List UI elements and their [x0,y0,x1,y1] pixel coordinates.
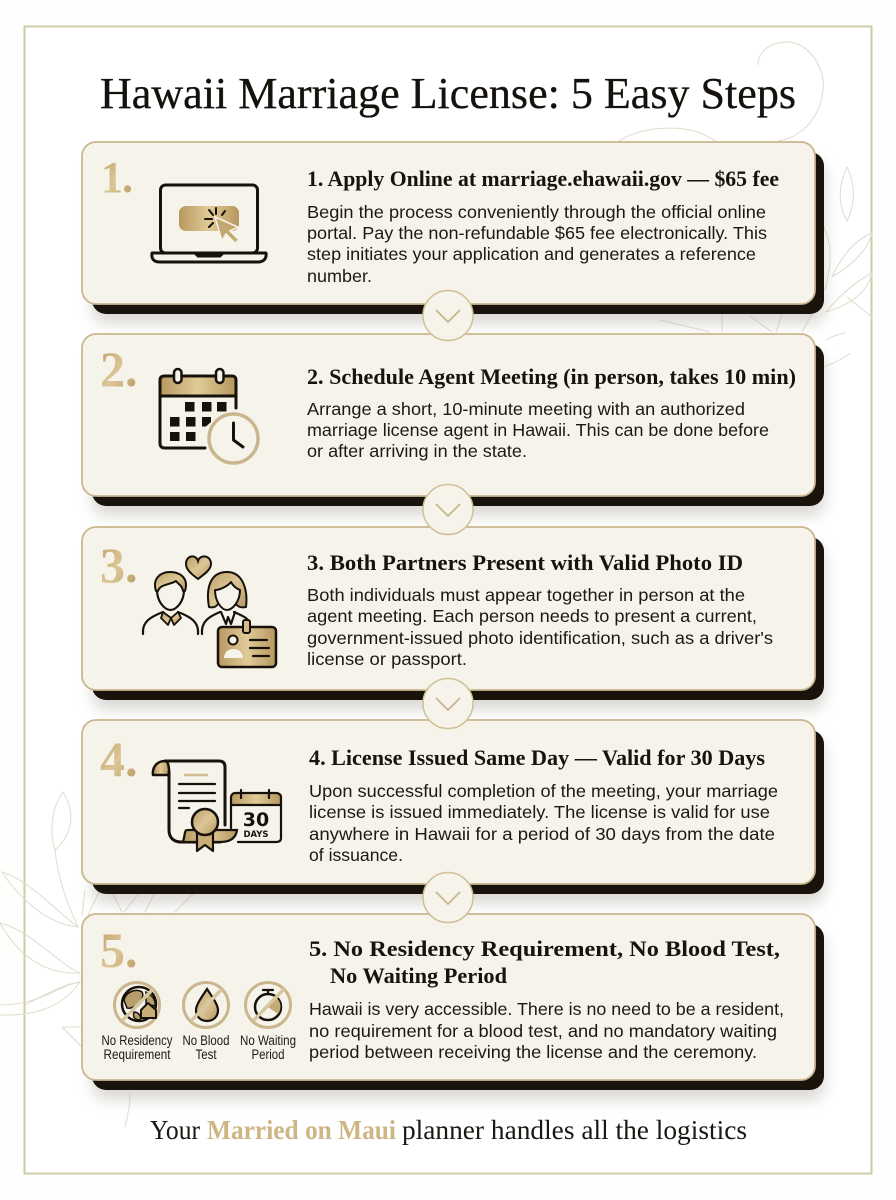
title: Hawaii Marriage License: 5 Easy Steps [100,69,796,118]
step 5 heading [309,936,780,988]
step 3 heading: 3. Both Partners Present with Valid Photo ID [307,550,743,575]
step 1 text [307,202,767,286]
step 2 text: marriage license agent in Hawaii. This can be done before [307,420,769,440]
step 3 text: government-issued photo identification, such as a driver's [307,628,773,648]
arrow: step 3 to 4 [423,678,473,728]
step 4 heading: 4. License Issued Same Day — Valid for 30 Days [309,745,765,770]
step 4 text: Upon successful completion of the meeting, your marriage [309,781,778,801]
step 1 heading: 1. Apply Online at marriage.ehawaii.gov — $65 fee [307,166,779,191]
panel: step 5 [82,914,825,1100]
icon captions [102,1033,296,1062]
step 1 text: number. [307,266,372,286]
botanical decoration: top right [618,42,872,367]
step 1 text: portal. Pay the non-refundable $65 fee electronically. This [307,223,767,243]
step 4 text: license is issued immediately. The license is valid for use [309,802,770,822]
step 5 heading: No Waiting Period [330,963,507,988]
panel: step 3: 3. [100,537,138,593]
step 1 text: Begin the process conveniently through the official online [307,202,766,222]
footer tagline [150,1115,747,1145]
step 2 text: Arrange a short, 10-minute meeting with an authorized [307,399,745,419]
icon: license scroll and 30 day calendar [153,761,281,851]
icon: license scroll and 30 day calendar: 30 [243,809,269,831]
icon captions: Requirement [104,1047,171,1062]
footer tagline: Your [150,1115,200,1145]
panel: step 1: 1. [101,153,133,202]
icon captions: Period [252,1047,284,1062]
step 5 text: no requirement for a blood test, and no mandatory waiting [309,1021,777,1041]
arrow: step 2 to 3 [423,484,473,534]
icon: no waiting period [246,982,290,1028]
step 4 text: of issuance. [309,845,403,865]
footer tagline: Married on Maui [207,1115,396,1145]
step 3 text: Both individuals must appear together in person at the [307,585,745,605]
panel: step 3 [82,527,825,710]
step 5 heading: 5. No Residency Requirement, No Blood Test, [309,936,780,961]
icon: laptop with click [152,185,266,262]
step 5 text [309,999,784,1062]
step 1 text: step initiates your application and generates a reference [307,244,756,264]
arrow: step 4 to 5 [423,872,473,922]
footer tagline: planner handles all the logistics [402,1115,747,1145]
step 3 text: license or passport. [307,649,467,669]
panel: step 1 [82,142,825,324]
icon captions: No Blood [182,1033,230,1048]
icon: no blood test [184,982,228,1028]
step 3 text [307,585,773,669]
step 5 text: period between receiving the license and the ceremony. [309,1042,757,1062]
icon captions: Test [196,1047,217,1062]
panel: step 5: 5. [100,922,138,978]
icon captions: No Residency [102,1033,173,1048]
icon: couple with photo ID [143,556,276,667]
step 3 text: agent meeting. Each person needs to present a current, [307,606,757,626]
panel: step 2: 2. [100,341,138,397]
panel: step 2 [82,334,825,516]
panel: step 4 [82,720,825,904]
step 4 text [309,781,778,865]
botanical decoration: bottom left [0,792,195,1127]
arrow: step 1 to 2 [423,290,473,340]
step 4 text: anywhere in Hawaii for a period of 30 days from the date [309,824,775,844]
icon captions: No Waiting [240,1033,296,1048]
step 2 text [307,399,769,461]
icon: license scroll and 30 day calendar: DAYS [243,830,269,840]
step 2 heading: 2. Schedule Agent Meeting (in person, takes 10 min) [307,364,796,389]
icon: no residency requirement [114,982,160,1028]
icon: calendar and clock [160,369,258,463]
step 2 text: or after arriving in the state. [307,441,527,461]
panel: step 4: 4. [100,731,138,787]
step 5 text: Hawaii is very accessible. There is no need to be a resident, [309,999,784,1019]
